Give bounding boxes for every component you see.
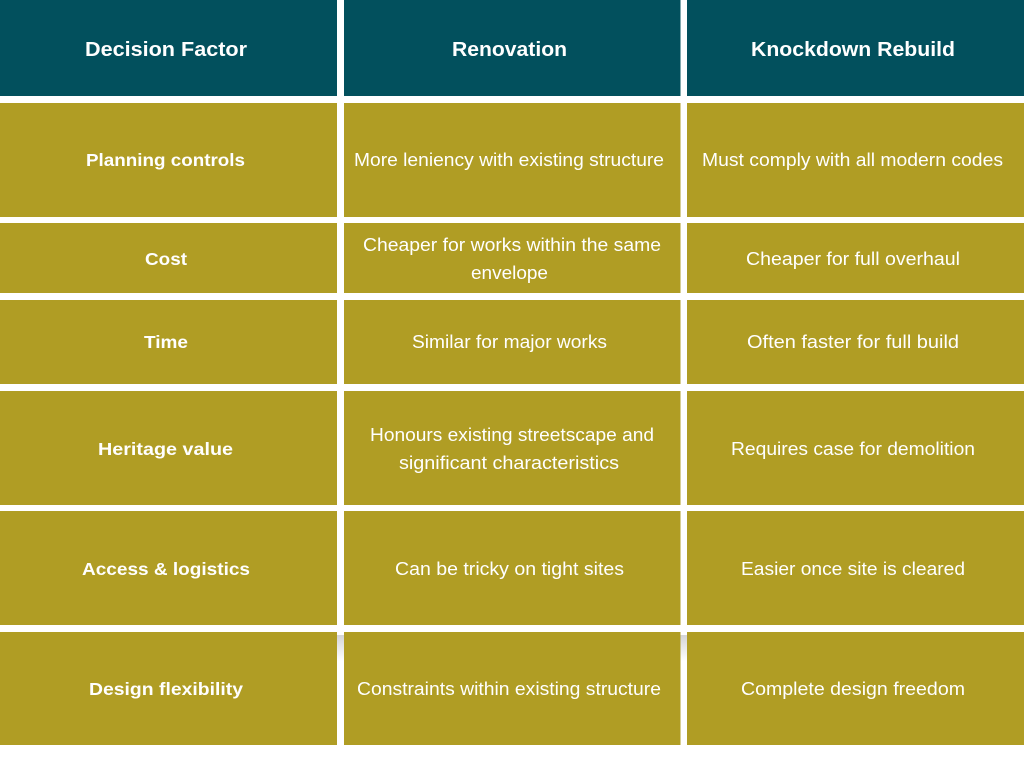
header: decision factor (0, 0, 337, 96)
factor: heritage value: Heritage value (98, 439, 233, 459)
renovation: planning controls: More leniency with existing structure (354, 150, 664, 170)
renovation: time (344, 300, 680, 384)
factor: design flexibility: Design flexibility (89, 679, 243, 699)
header row (0, 0, 1024, 96)
rebuild: planning controls: Must comply with all modern codes (702, 150, 1003, 170)
row: access and logistics (0, 511, 1024, 625)
factor: access and logistics: Access & logistics (82, 559, 250, 579)
factor: access and logistics (0, 511, 337, 625)
row: time (0, 300, 1024, 384)
row: design flexibility (0, 632, 1024, 745)
rebuild: access and logistics (687, 511, 1024, 625)
rebuild: cost: Cheaper for full overhaul (746, 249, 960, 269)
row: cost (0, 223, 1024, 293)
factor: time (0, 300, 337, 384)
header: renovation: Renovation (452, 39, 567, 61)
header: knockdown rebuild (687, 0, 1024, 96)
header: renovation (344, 0, 680, 96)
factor: time: Time (144, 332, 188, 352)
header: decision factor: Decision Factor (85, 39, 247, 61)
rebuild: time (687, 300, 1024, 384)
renovation: cost (344, 223, 680, 293)
row: heritage value (0, 391, 1024, 505)
header: knockdown rebuild: Knockdown Rebuild (751, 39, 955, 61)
renovation: heritage value: Honours existing streetscape and (370, 425, 654, 445)
renovation: time: Similar for major works (412, 332, 607, 352)
renovation: cost: Cheaper for works within the same (363, 235, 661, 255)
rebuild: design flexibility: Complete design freedom (741, 679, 965, 699)
factor: planning controls (0, 103, 337, 217)
renovation: design flexibility: Constraints within existing structure (357, 679, 661, 699)
factor: design flexibility (0, 632, 337, 745)
renovation: planning controls (344, 103, 680, 217)
renovation: access and logistics (344, 511, 680, 625)
renovation: design flexibility (344, 632, 680, 745)
rebuild: design flexibility (687, 632, 1024, 745)
renovation: cost: envelope (471, 263, 548, 283)
factor: planning controls: Planning controls (86, 150, 245, 170)
factor: cost: Cost (145, 249, 187, 269)
row: planning controls (0, 103, 1024, 217)
renovation: heritage value: significant characteristics (399, 453, 619, 473)
rebuild: cost (687, 223, 1024, 293)
rebuild: heritage value: Requires case for demolition (731, 439, 975, 459)
factor: heritage value (0, 391, 337, 505)
renovation: heritage value (344, 391, 680, 505)
factor: cost (0, 223, 337, 293)
rebuild: access and logistics: Easier once site is cleared (741, 559, 965, 579)
rebuild: planning controls (687, 103, 1024, 217)
rebuild: time: Often faster for full build (747, 332, 959, 352)
renovation: access and logistics: Can be tricky on tight sites (395, 559, 624, 579)
rebuild: heritage value (687, 391, 1024, 505)
